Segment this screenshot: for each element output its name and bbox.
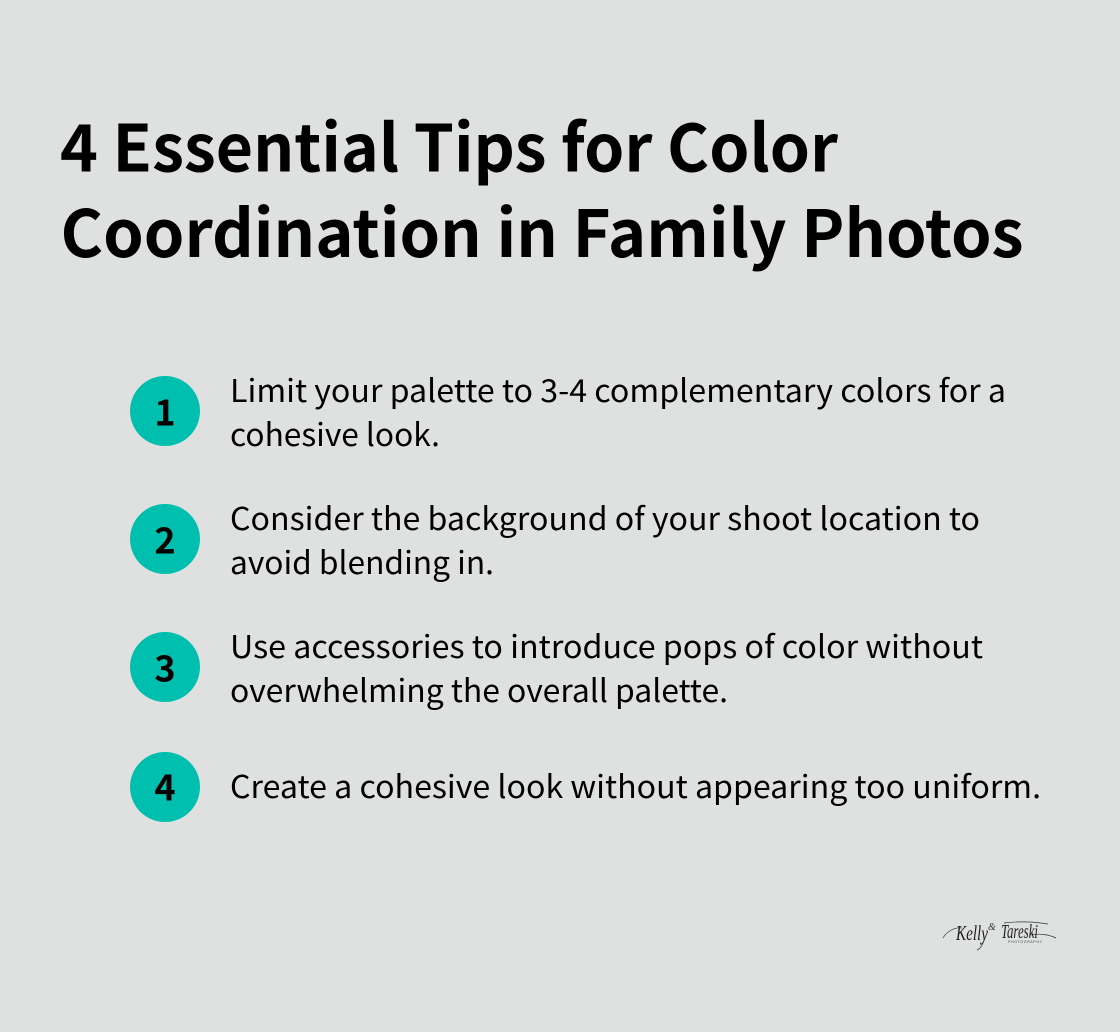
tip 2: [130, 494, 980, 584]
signature logo: &: [988, 922, 996, 933]
tip 2 text: avoid blending in.: [230, 538, 494, 584]
title: [60, 96, 1024, 276]
tip 1 text: [230, 366, 1006, 456]
number badge 3: 3: [154, 640, 176, 692]
number badge 3: [130, 632, 200, 702]
tip 1 text: Limit your palette to 3-4 complementary colors for a: [230, 366, 1006, 412]
number badge 4: [130, 752, 200, 822]
number badge 2: 2: [154, 512, 176, 564]
tip 3 text: overwhelming the overall palette.: [230, 666, 728, 712]
signature logo: [943, 921, 1056, 950]
signature logo: Tareski: [1001, 921, 1038, 943]
signature logo: PHOTOGRAPHY: [1008, 940, 1043, 944]
number badge 1: 1: [154, 384, 176, 436]
title: Coordination in Family Photos: [60, 182, 1024, 276]
tip 1 text: cohesive look.: [230, 410, 440, 456]
tip 1: [130, 366, 1006, 456]
tip 4: [130, 752, 1041, 822]
tip 4 text: Create a cohesive look without appearing too uniform.: [230, 762, 1041, 808]
tip 3 text: Use accessories to introduce pops of color without: [230, 622, 983, 668]
number badge 4: 4: [154, 760, 176, 812]
tip 2 text: [230, 494, 980, 584]
number badge 1: [130, 376, 200, 446]
tip 3 text: [230, 622, 983, 712]
title: 4 Essential Tips for Color: [60, 96, 839, 190]
tip 3: [130, 622, 983, 712]
number badge 2: [130, 504, 200, 574]
tip 2 text: Consider the background of your shoot location to: [230, 494, 980, 540]
signature logo: Kelly: [955, 921, 988, 945]
